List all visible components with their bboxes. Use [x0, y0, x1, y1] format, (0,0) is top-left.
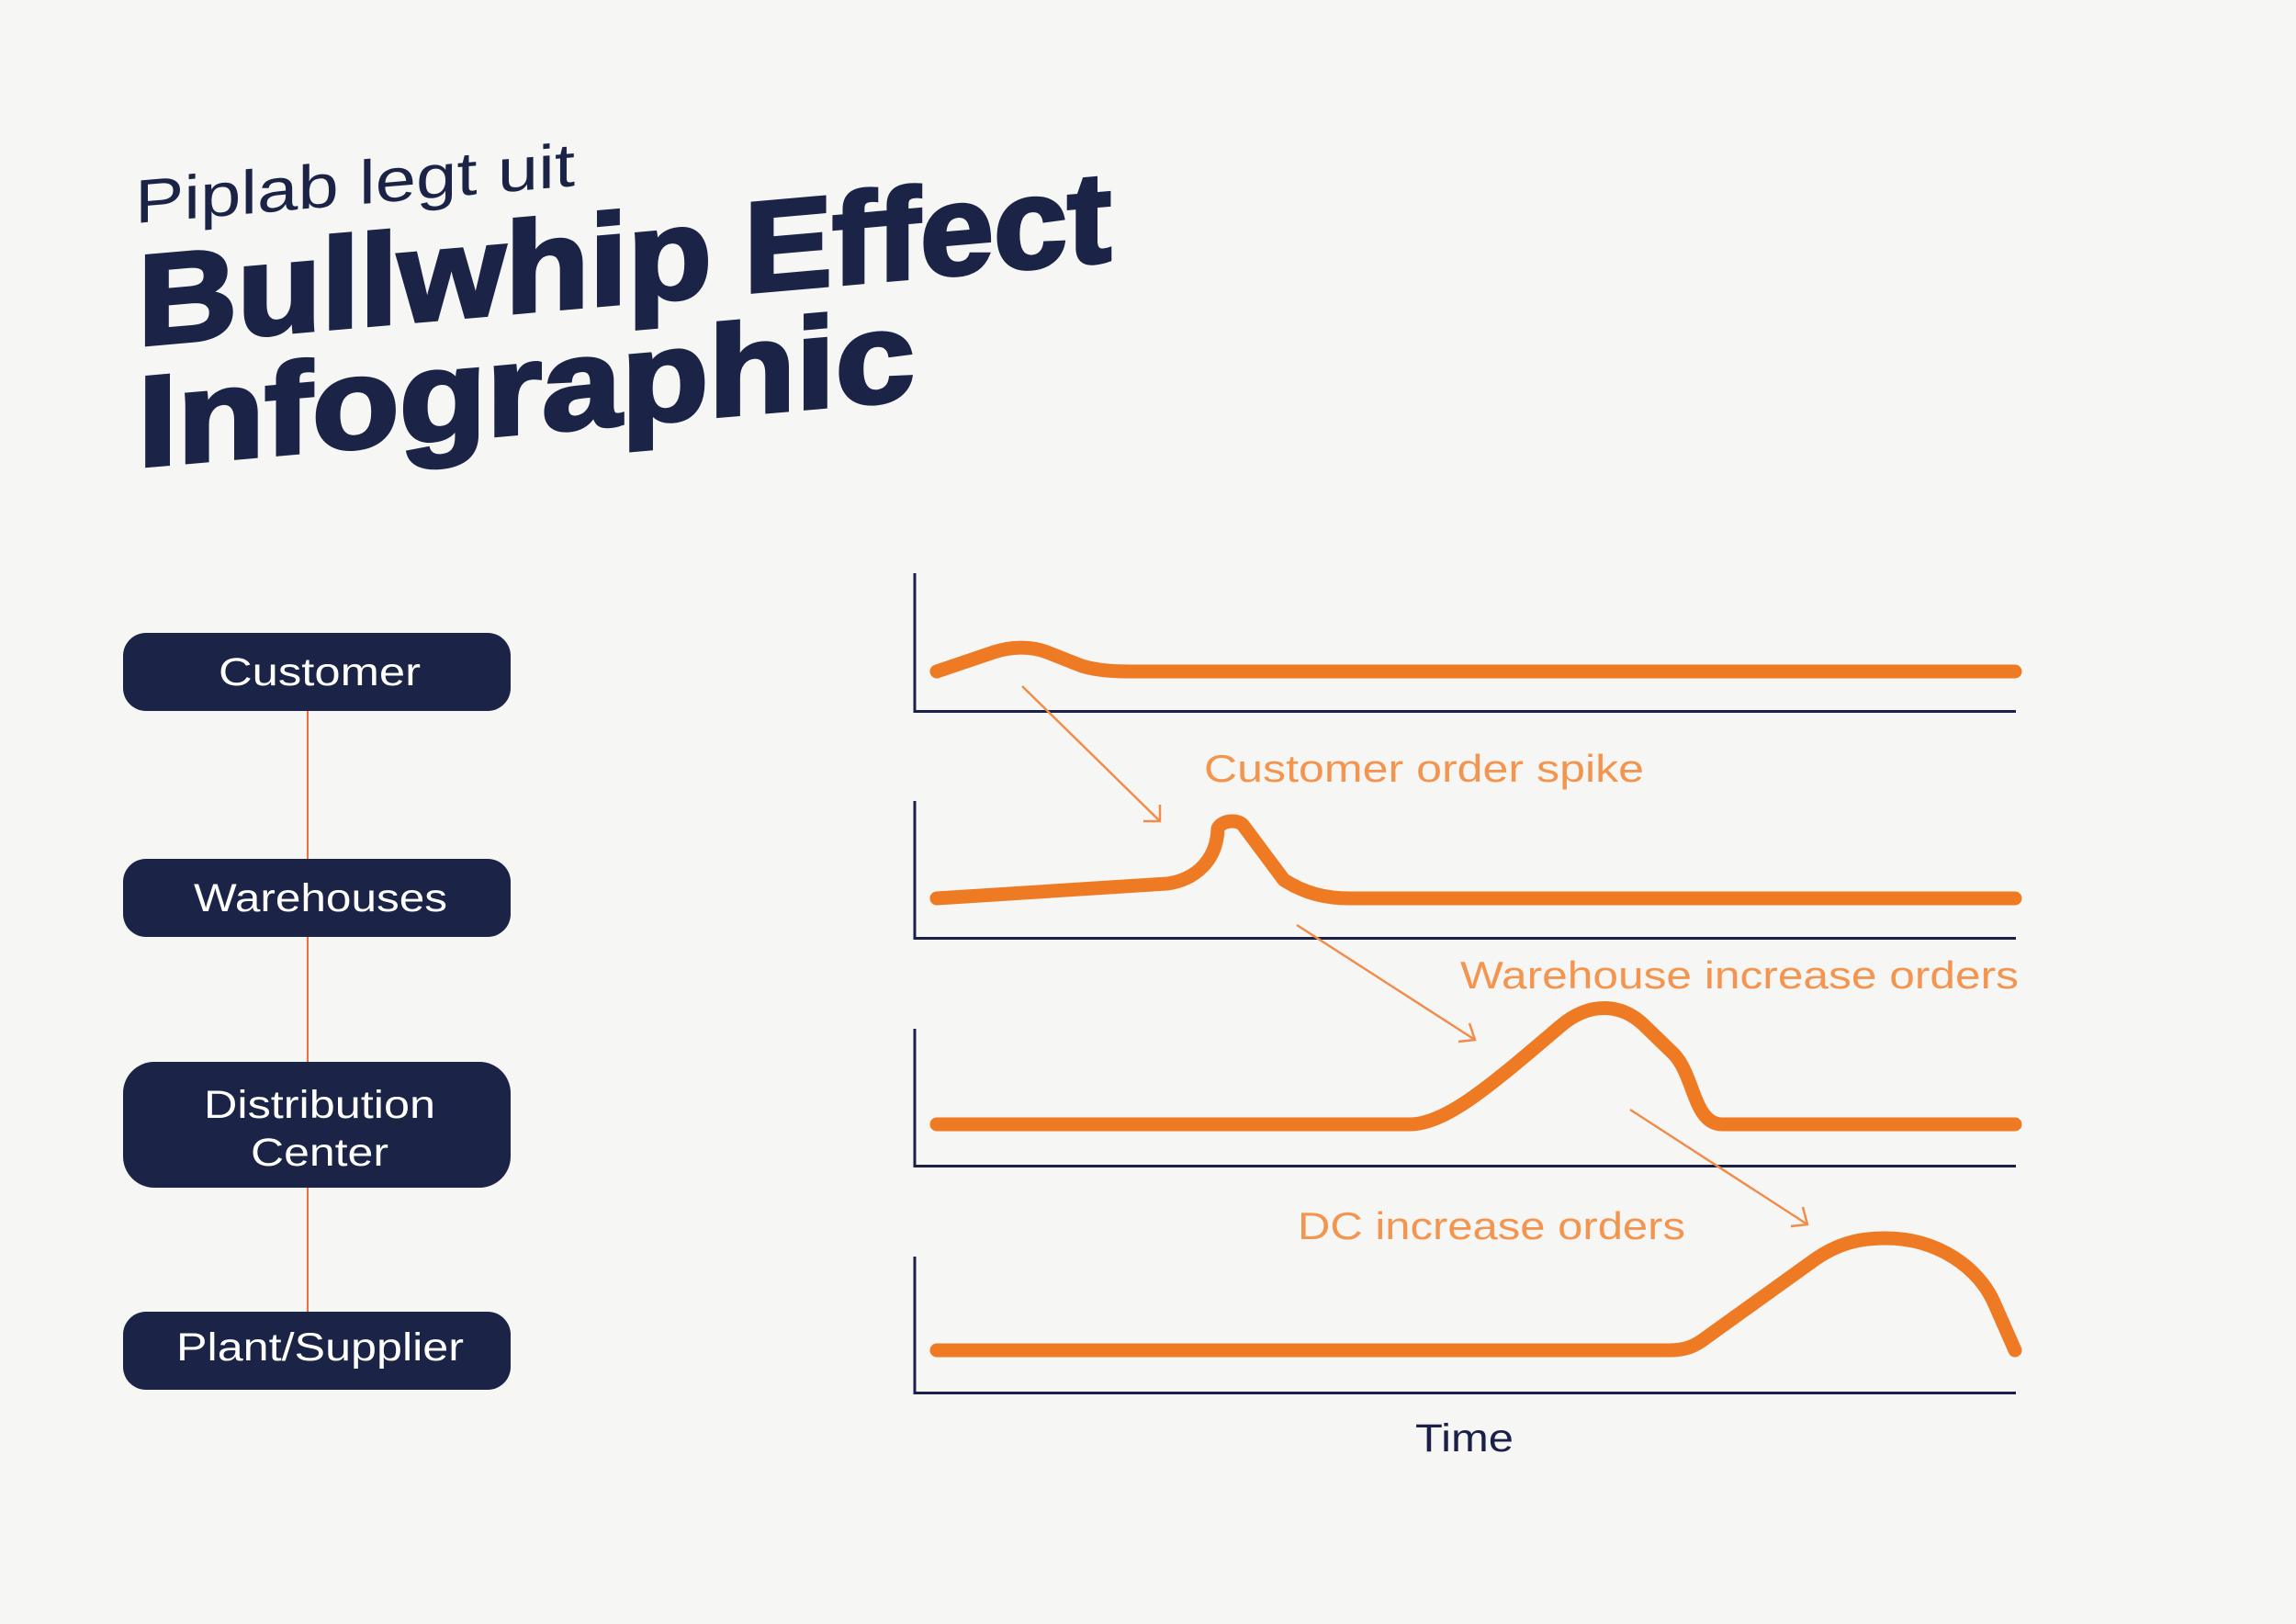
heading: Infographic: Infographic [138, 283, 915, 494]
label: customer order spike: Customer order spike [1204, 747, 1644, 790]
arrow: warehouses to distribution center [1297, 925, 1475, 1042]
axis label: time: Time [1415, 1416, 1514, 1460]
heading: Bullwhip Effect [138, 144, 1111, 373]
stage: Distribution Center [123, 1062, 511, 1188]
heading: Bullwhip Effect: Bullwhip [138, 179, 712, 373]
stage: Plant/Supplier: Plant/Supplier [176, 1325, 464, 1370]
connector lines [307, 710, 309, 1312]
arrow: distribution center to plant [1630, 1110, 1807, 1226]
stage: Customer: Customer [219, 650, 421, 694]
stage: Plant/Supplier [123, 1312, 511, 1390]
label: DC increase orders: DC increase orders [1298, 1204, 1685, 1247]
stage: Warehouses: Warehouses [194, 876, 447, 920]
chart: distribution center [915, 1009, 2016, 1167]
stage: Distribution Center: Distribution [204, 1083, 435, 1127]
panel: supply chain stages [123, 633, 511, 1390]
stage: Customer [123, 633, 511, 711]
chart: warehouses [915, 801, 2016, 939]
panel: order charts over time [915, 573, 2019, 1460]
chart: customer [915, 573, 2016, 711]
subtitle: Piplab legt uit [135, 130, 575, 237]
label: warehouse increase orders: Warehouse increase orders [1460, 953, 2019, 997]
stage: Distribution Center: Center [251, 1131, 388, 1175]
title block [135, 130, 1111, 494]
stage: Warehouses [123, 859, 511, 937]
chart: plant/supplier [915, 1238, 2016, 1393]
arrow: customer to warehouses [1022, 686, 1160, 821]
heading: Bullwhip Effect: Effect [744, 144, 1111, 321]
